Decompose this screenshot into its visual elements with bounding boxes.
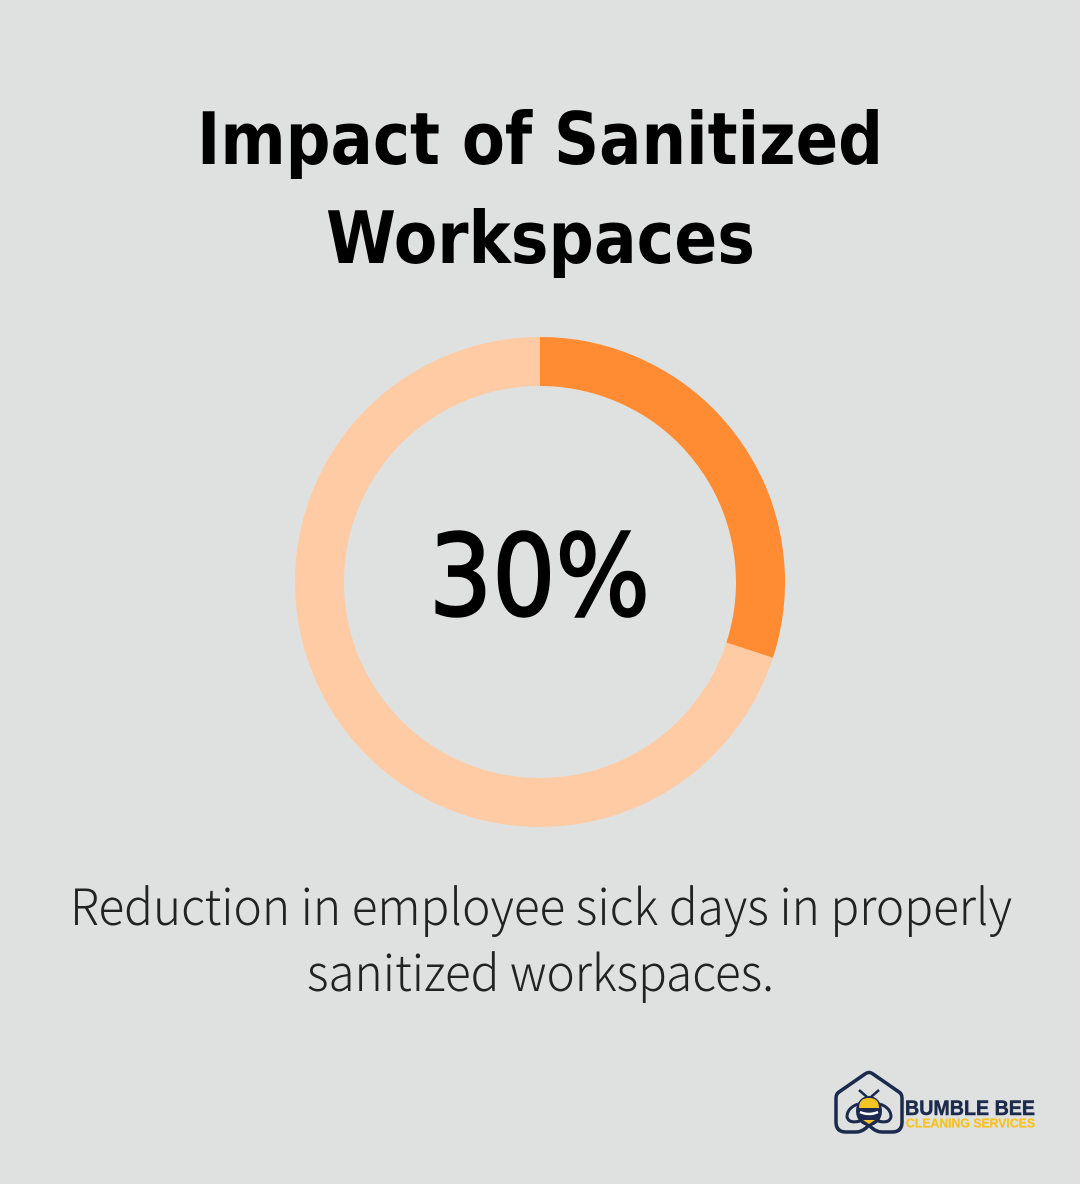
- donut value: 30%: [429, 512, 650, 642]
- description: sanitized workspaces.: [307, 934, 774, 1006]
- logo: Bumble Bee Cleaning Services: [836, 1072, 1035, 1132]
- description: Reduction in employee sick days in properly: [70, 868, 1012, 940]
- title: Workspaces: [326, 196, 755, 280]
- title: Impact of Sanitized: [197, 97, 883, 181]
- icon: house with bee: [836, 1072, 902, 1132]
- title: [197, 97, 883, 280]
- description: [70, 868, 1012, 1006]
- logo name: BUMBLE BEE: [905, 1097, 1035, 1120]
- logo tagline: CLEANING SERVICES: [906, 1116, 1035, 1130]
- donut chart: 30%: [320, 362, 760, 802]
